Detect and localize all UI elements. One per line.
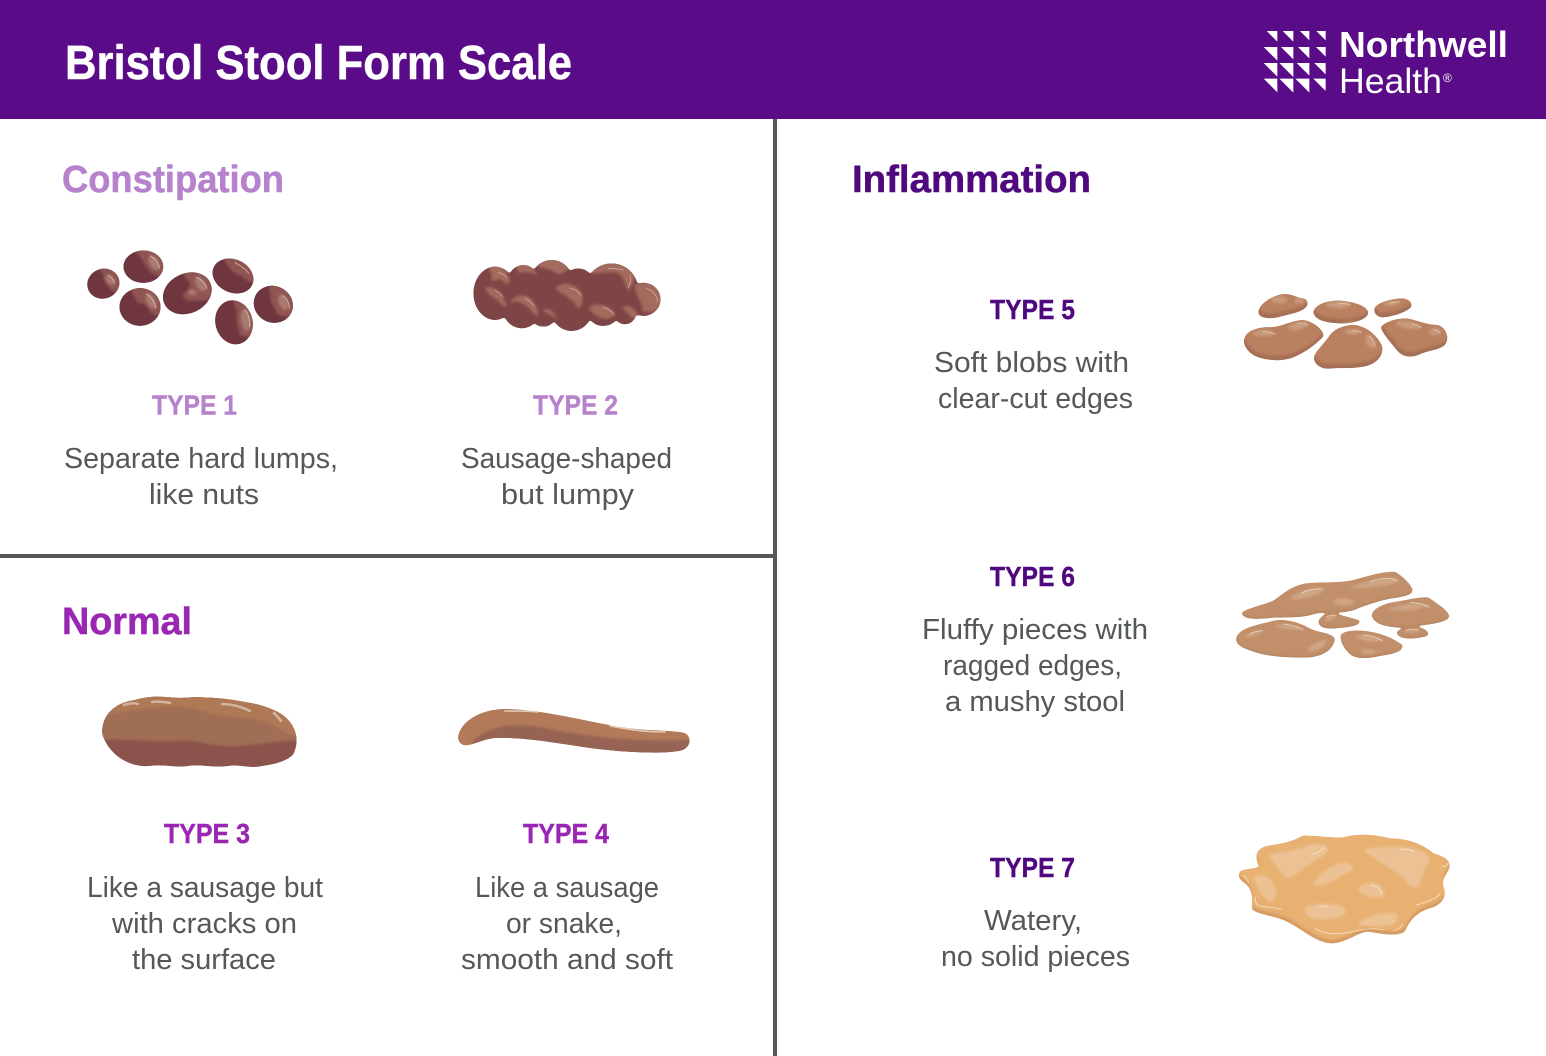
logo: Northwell Health xyxy=(1264,24,1508,101)
description: type 4: smooth and soft xyxy=(461,944,673,976)
description: type 5 xyxy=(934,347,1133,415)
heading: inflammation: Inflammation xyxy=(852,159,1091,201)
label: type 6: TYPE 6 xyxy=(990,561,1075,592)
description: type 2: but lumpy xyxy=(501,479,635,511)
description: type 2 xyxy=(461,443,672,511)
label: type 5: TYPE 5 xyxy=(990,294,1075,325)
label: type 4: TYPE 4 xyxy=(523,818,609,849)
title: Bristol Stool Form Scale xyxy=(65,37,572,90)
panel: normal xyxy=(62,601,695,976)
description: type 3: the surface xyxy=(132,944,276,976)
label: type 2: TYPE 2 xyxy=(533,390,618,420)
illustration: type 2 stool xyxy=(474,260,660,331)
heading: normal: Normal xyxy=(62,601,192,643)
description: type 4: or snake, xyxy=(506,908,622,940)
description: type 1: like nuts xyxy=(149,479,259,511)
description: type 2: Sausage-shaped xyxy=(461,443,672,475)
illustration: type 4 stool xyxy=(458,709,690,753)
illustration: type 6 stool xyxy=(1236,572,1449,658)
label: type 1: TYPE 1 xyxy=(152,390,237,420)
description: type 6: Fluffy pieces with xyxy=(922,614,1148,646)
heading: constipation: Constipation xyxy=(62,159,284,201)
description: type 1 xyxy=(64,443,338,511)
description: type 7: no solid pieces xyxy=(941,941,1130,973)
logo: Northwell Health: Northwell xyxy=(1339,24,1508,65)
label: type 7: TYPE 7 xyxy=(990,852,1075,883)
description: type 4: Like a sausage xyxy=(475,872,659,904)
description: type 7 xyxy=(941,905,1130,973)
description: type 1: Separate hard lumps, xyxy=(64,443,338,475)
illustration: type 3 stool xyxy=(102,696,297,767)
description: type 4 xyxy=(461,872,673,976)
description: type 7: Watery, xyxy=(984,905,1082,937)
description: type 3 xyxy=(87,872,323,976)
illustration: type 1 stool xyxy=(87,250,293,344)
logo: Northwell Health: ® xyxy=(1443,71,1452,85)
label: type 3: TYPE 3 xyxy=(164,818,250,849)
description: type 5: Soft blobs with xyxy=(934,347,1129,379)
description: type 3: Like a sausage but xyxy=(87,872,323,904)
description: type 3: with cracks on xyxy=(111,908,297,940)
logo: Northwell Health: Health xyxy=(1339,62,1442,101)
illustration: type 7 stool xyxy=(1239,831,1450,943)
panel: constipation xyxy=(62,159,672,511)
description: type 6: ragged edges, xyxy=(943,650,1122,682)
description: type 5: clear-cut edges xyxy=(938,383,1133,415)
description: type 6: a mushy stool xyxy=(945,686,1125,718)
header banner xyxy=(0,0,1546,119)
panel: inflammation xyxy=(852,159,1450,973)
description: type 6 xyxy=(922,614,1148,718)
illustration: type 5 stool xyxy=(1244,289,1448,369)
